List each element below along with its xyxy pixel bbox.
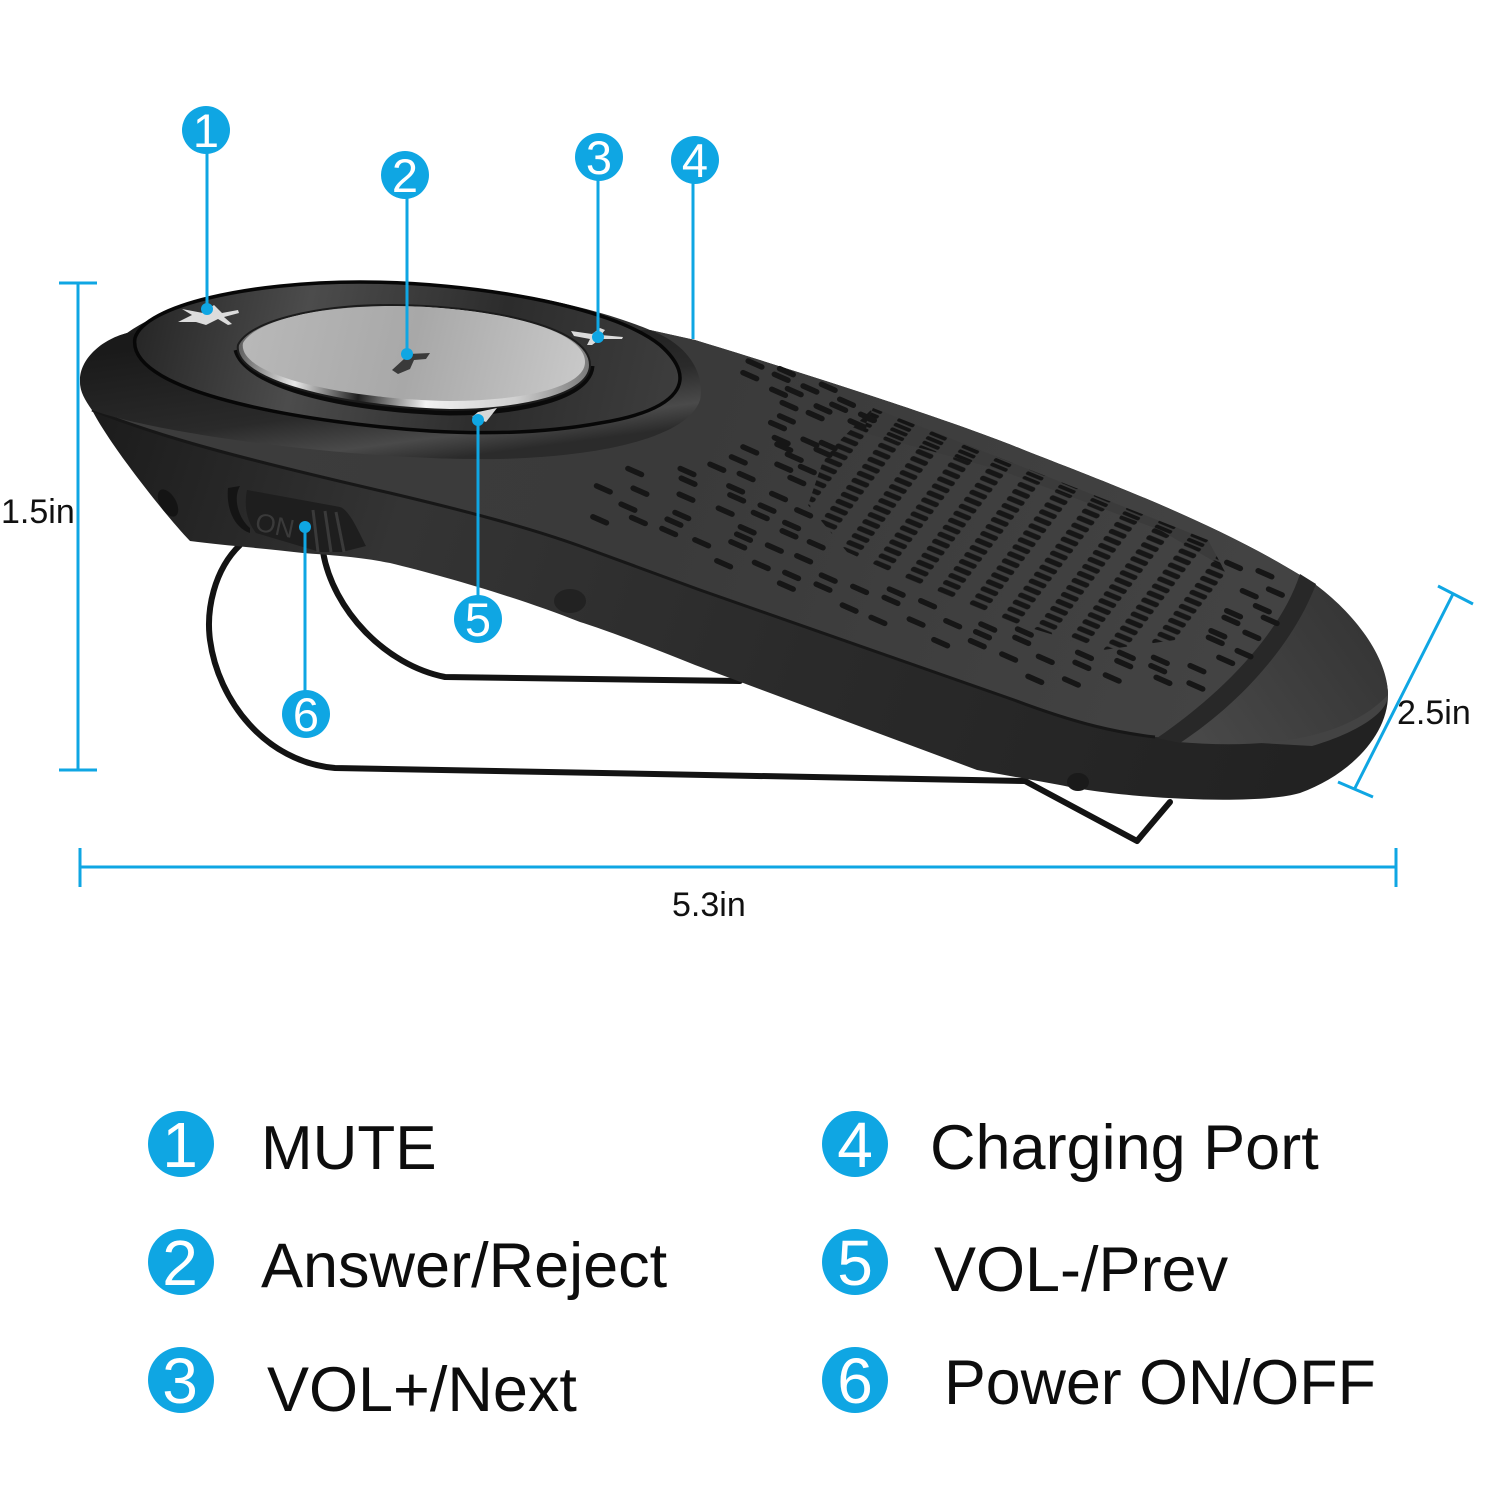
compressed upper slot pattern: [862, 408, 1222, 566]
callout 3: [575, 131, 623, 343]
dense speaker slots: [808, 408, 1232, 650]
legend item: VOL+/Next: VOL+/Next: [267, 1355, 577, 1425]
top surface seam: [92, 410, 1155, 737]
legend item: VOL+/Next: 3: [162, 1345, 198, 1417]
wire stand clip: [209, 545, 1170, 841]
button lower shadow arc: [236, 350, 592, 413]
dimension: height 1.5in: [1, 283, 97, 770]
legend item: VOL-/Prev: [822, 1227, 1229, 1305]
speaker end cap: [1178, 582, 1388, 744]
rear hole: [1067, 773, 1089, 791]
bezel ring: [135, 282, 680, 433]
icon: phone handset: [392, 353, 430, 374]
power switch: [228, 486, 366, 552]
legend item: VOL-/Prev: VOL-/Prev: [934, 1235, 1229, 1305]
legend item: Charging Port: Charging Port: [930, 1113, 1319, 1183]
dimension: width 2.5in: [1338, 586, 1473, 797]
sparse speaker slots: [593, 361, 1282, 689]
callout 4: [671, 134, 719, 339]
callout 1: 1: [193, 104, 219, 157]
callout 3: 3: [586, 131, 612, 184]
callout 4: 4: [682, 134, 708, 187]
callout 1: [182, 104, 230, 315]
dimension: width 2.5in: 2.5in: [1397, 694, 1471, 732]
legend item: VOL-/Prev: 5: [837, 1227, 873, 1299]
legend item: Power ON/OFF: 6: [837, 1345, 873, 1417]
icon: mute: [178, 305, 239, 325]
switch label: ON: [253, 507, 297, 544]
legend item: Power ON/OFF: Power ON/OFF: [944, 1348, 1376, 1418]
silver answer button: [243, 306, 585, 401]
callout 6: 6: [293, 688, 319, 741]
callout 5: [454, 414, 502, 646]
callout 6: [282, 521, 330, 741]
icon: volume minus notch: [472, 408, 497, 422]
legend item: MUTE: MUTE: [261, 1114, 437, 1183]
legend item: MUTE: [148, 1109, 437, 1183]
chrome ring: [238, 305, 590, 410]
top surface: [92, 330, 1388, 746]
icon: volume plus: [571, 328, 623, 345]
side button: [554, 589, 586, 613]
dimension: length 5.3in: 5.3in: [672, 886, 746, 924]
raised bezel halo: [80, 330, 701, 459]
callout 5: 5: [465, 593, 491, 646]
callout 2: [381, 149, 429, 360]
cap divider band: [1157, 574, 1316, 743]
dimension: height 1.5in: 1.5in: [1, 493, 75, 531]
legend item: Answer/Reject: 2: [162, 1227, 198, 1299]
callout 2: 2: [392, 149, 418, 202]
compressed upper slots backing: [862, 408, 1222, 566]
speakerphone device: [80, 281, 1388, 800]
legend item: VOL+/Next: [148, 1345, 577, 1425]
legend item: Answer/Reject: Answer/Reject: [261, 1231, 668, 1301]
body silhouette: [80, 281, 1388, 800]
dimension: length 5.3in: [80, 848, 1396, 924]
legend item: MUTE: 1: [162, 1109, 198, 1181]
legend item: Charging Port: 4: [837, 1109, 873, 1181]
side hole: [154, 486, 182, 520]
